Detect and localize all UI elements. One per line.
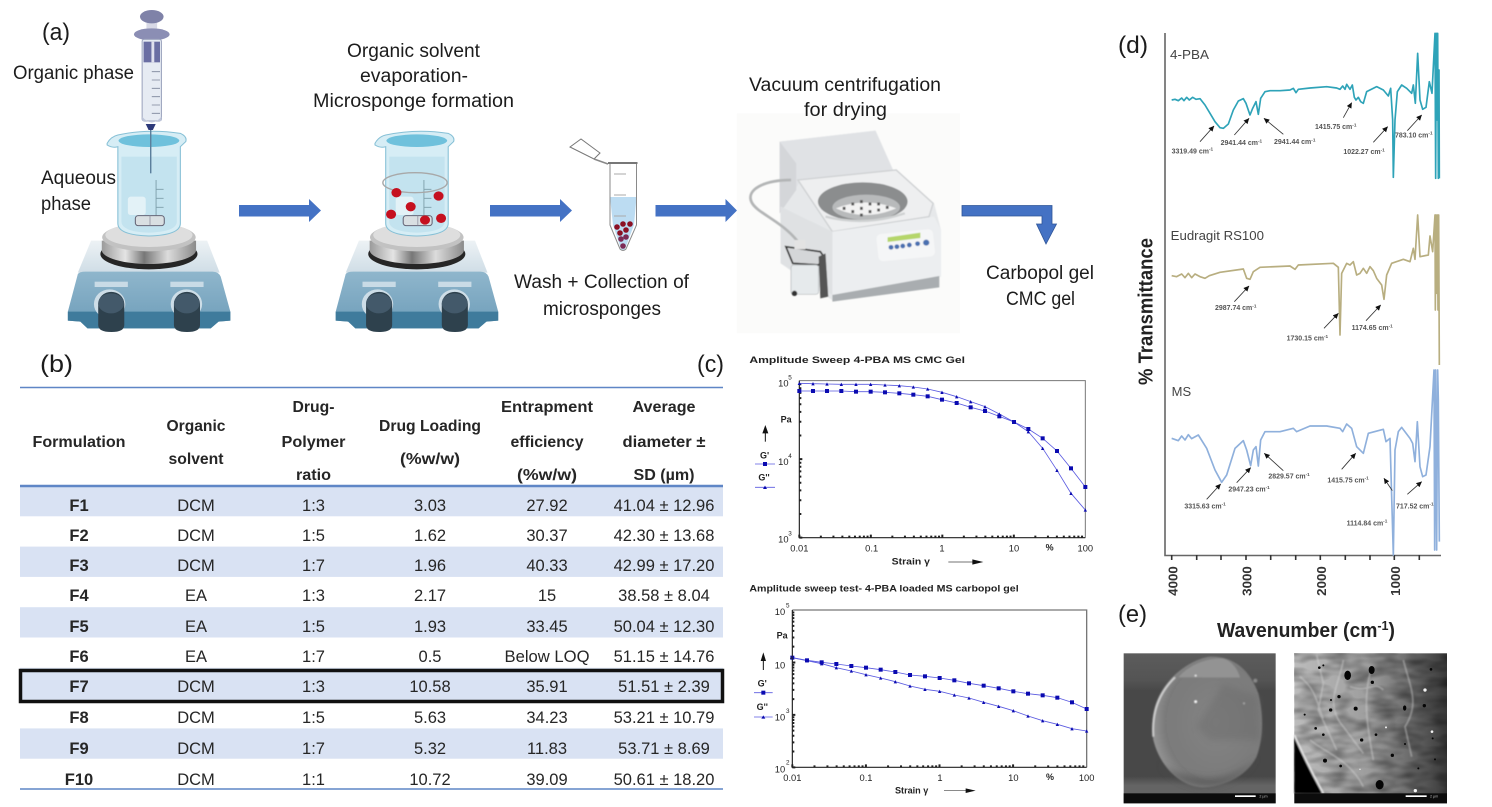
table header: Entrapment — [501, 399, 593, 416]
table row F7 highlighted: 1:3 — [302, 678, 325, 696]
panel label (d): (d) — [1118, 32, 1148, 59]
x axis labels: 0.1 — [860, 773, 872, 783]
table row F9: 53.71 ± 8.69 — [618, 740, 710, 758]
panel: (a) microsponge preparation workflow — [13, 10, 1094, 333]
table row F9 — [69, 740, 710, 758]
table row F3: 40.33 — [526, 557, 568, 575]
table row F7 highlighted: 35.91 — [526, 678, 568, 696]
spectrum: 4-PBA: -1 — [1428, 131, 1433, 136]
image: SEM porous surface: 2 µm — [1430, 794, 1438, 798]
spectrum: MS: -1 — [1383, 519, 1388, 524]
y axis labels: 4 — [788, 453, 792, 460]
chart: amplitude sweep CMC gel — [749, 355, 1093, 566]
panel: (c) amplitude sweep charts — [697, 351, 1094, 795]
table row F6: Below LOQ — [504, 648, 590, 666]
label: microsponges: microsponges — [543, 299, 661, 320]
table row F5: F5 — [69, 618, 89, 636]
spectrum: 4-PBA — [1170, 33, 1439, 178]
table row F8: F8 — [69, 709, 89, 727]
y axis labels: 10 — [775, 712, 785, 722]
table row F9: 5.32 — [414, 740, 446, 758]
table row F1: 27.92 — [526, 497, 568, 515]
x axis tick labels — [1165, 566, 1403, 596]
spectrum: Eudragit RS100: MS — [1172, 384, 1191, 399]
table row F3: 1:7 — [302, 557, 325, 575]
spectrum: Eudragit RS100: 1174.65 cm — [1352, 325, 1389, 332]
spectrum: MS: -1 — [1365, 476, 1369, 481]
panel label (b): (b) — [40, 351, 73, 378]
arrow: step 2 — [490, 199, 572, 222]
table row F3: F3 — [69, 557, 89, 575]
table row bands — [20, 486, 723, 759]
legend: G' — [758, 679, 767, 689]
spectrum: MS: 3315.63 cm — [1184, 503, 1222, 510]
x axis labels: 10 — [1009, 544, 1019, 554]
table header: efficiency — [510, 434, 584, 451]
spectrum: MS: -1 — [1222, 502, 1226, 507]
table row F3 — [69, 557, 714, 575]
table header: Average — [632, 399, 696, 416]
spectrum: 4-PBA: -1 — [1381, 147, 1385, 152]
y axis labels: 10 — [775, 607, 785, 617]
table row F8: 53.21 ± 10.79 — [614, 709, 714, 727]
label: carbopol gel: Carbopol gel — [986, 263, 1094, 284]
legend: G'' — [758, 472, 770, 482]
series G'' — [792, 658, 1087, 731]
table row F2: 30.37 — [526, 527, 568, 545]
arrow: step 1 — [239, 199, 321, 222]
legend — [754, 679, 773, 719]
axis title Pa — [762, 415, 793, 442]
y axis labels — [778, 375, 792, 545]
chart title: Amplitude Sweep 4-PBA MS CMC Gel — [749, 355, 965, 365]
x axis labels: 0.01 — [783, 773, 801, 783]
y axis labels: 5 — [786, 602, 790, 609]
table row F8: DCM — [177, 709, 215, 727]
x axis labels: 100 — [1079, 773, 1094, 783]
table row F5: 1.93 — [414, 618, 446, 636]
spectrum: MS: 1114.84 cm — [1347, 520, 1383, 527]
table row F5: 50.04 ± 12.30 — [614, 618, 714, 636]
series G'' — [799, 383, 1085, 510]
panel: (d) FTIR spectra — [1118, 32, 1441, 642]
panel: (b) formulation table — [20, 351, 723, 789]
spectrum: Eudragit RS100: Eudragit RS100 — [1171, 228, 1264, 243]
table row F9: F9 — [69, 740, 89, 758]
arrow: step 3 — [656, 199, 737, 222]
x axis labels: 0.1 — [865, 544, 878, 554]
table row F9: 1:7 — [302, 740, 325, 758]
x axis labels: % — [1046, 772, 1054, 782]
spectrum: Eudragit RS100: -1 — [1252, 303, 1257, 308]
panel: (e) SEM micrographs — [1118, 601, 1447, 803]
table row F10: 1:1 — [302, 771, 325, 789]
table row F8 — [69, 709, 714, 727]
icon: hot plate with microsponges forming — [336, 131, 498, 332]
table row F7 highlighted: DCM — [177, 678, 215, 696]
table row F4: 15 — [538, 587, 556, 605]
label: phase: phase — [41, 194, 91, 215]
panel label (a): (a) — [42, 19, 70, 46]
table row F10: 39.09 — [526, 771, 568, 789]
table row F8: 5.63 — [414, 709, 446, 727]
image: SEM whole microsponge — [1124, 653, 1276, 803]
spectrum: 4-PBA: -1 — [1209, 147, 1214, 152]
table header: Organic — [166, 418, 226, 435]
table row F10: DCM — [177, 771, 215, 789]
table row F5 — [69, 618, 714, 636]
spectrum: 4-PBA: 783.10 cm — [1395, 132, 1428, 139]
table header: solvent — [168, 451, 224, 468]
x axis tick labels: 3000 — [1240, 566, 1255, 596]
series G' — [799, 391, 1085, 487]
table rules — [20, 388, 723, 789]
table row F4: 38.58 ± 8.04 — [618, 587, 710, 605]
table row F8: 1:5 — [302, 709, 325, 727]
spectrum: MS: 2947.23 cm — [1228, 487, 1266, 494]
x axis labels: 1 — [939, 544, 945, 554]
table header: Polymer — [282, 434, 346, 451]
spectrum: MS: 2829.57 cm — [1268, 474, 1306, 481]
table row F6 — [69, 648, 714, 666]
panel label (e): (e) — [1118, 601, 1147, 628]
table row F3: 1.96 — [414, 557, 446, 575]
table row F10: 50.61 ± 18.20 — [614, 771, 714, 789]
icon: syringe with organic phase — [134, 10, 170, 173]
spectrum: 4-PBA: -1 — [1258, 138, 1263, 143]
y axis labels: 10 — [775, 660, 785, 670]
y axis labels: 10 — [778, 379, 789, 389]
table row F2: 1.62 — [414, 527, 446, 545]
table row F10: F10 — [65, 771, 93, 789]
table row F8: 34.23 — [526, 709, 568, 727]
table row F1: F1 — [69, 497, 89, 515]
y axis labels: 10 — [778, 457, 789, 467]
legend — [755, 450, 775, 489]
chart: amplitude sweep carbopol gel — [749, 584, 1094, 795]
y axis labels: 10 — [775, 764, 785, 774]
axis title strain — [892, 556, 983, 566]
table row F1: 1:3 — [302, 497, 325, 515]
axis title Pa: Pa — [777, 630, 789, 640]
table header — [32, 399, 706, 484]
spectrum: 4-PBA: 2941.44 cm — [1274, 139, 1311, 146]
table row F2: F2 — [69, 527, 89, 545]
label: vacuum centrifugation: Vacuum centrifugation — [749, 75, 941, 96]
spectrum: MS: 1415.75 cm — [1327, 477, 1365, 484]
table header: SD (µm) — [634, 467, 694, 484]
table row F5: 33.45 — [526, 618, 568, 636]
table row F4: 1:3 — [302, 587, 325, 605]
table row F7 highlighted: 51.51 ± 2.39 — [618, 678, 710, 696]
table row F7 highlighted — [20, 670, 722, 702]
table row F2 — [69, 527, 714, 545]
table row F2: 1:5 — [302, 527, 325, 545]
y axis labels: 10 — [778, 535, 789, 545]
table row F6: EA — [185, 648, 207, 666]
table header: ratio — [296, 467, 331, 484]
table header: (%w/w) — [517, 467, 577, 484]
legend: G' — [760, 450, 769, 460]
table row F9: DCM — [177, 740, 215, 758]
spectrum: MS: 717.52 cm — [1396, 503, 1429, 510]
spectrum: MS: -1 — [1266, 485, 1270, 490]
table header: Drug Loading — [379, 418, 481, 435]
label: CMC gel: CMC gel — [1006, 289, 1075, 310]
x axis labels — [790, 543, 1093, 554]
label: aqueous: Aqueous — [41, 168, 116, 189]
table row F1 — [69, 497, 714, 515]
axis title Pa: Pa — [781, 415, 793, 425]
label: for drying: for drying — [804, 100, 887, 121]
table row F4: F4 — [69, 587, 89, 605]
axes — [1165, 33, 1441, 560]
x axis labels: 0.01 — [790, 544, 808, 554]
y axis labels: 5 — [788, 375, 792, 382]
table row F4 — [69, 587, 710, 605]
table header: diameter ± — [622, 434, 706, 451]
y axis labels: 4 — [790, 655, 794, 662]
table header: (%w/w) — [400, 451, 460, 468]
x axis title: -1 — [1377, 618, 1389, 633]
spectrum: 4-PBA: 2941.44 cm — [1221, 140, 1258, 147]
table row F10: 10.72 — [409, 771, 451, 789]
x axis tick labels: 4000 — [1165, 566, 1180, 596]
panel label (c): (c) — [697, 351, 724, 378]
series G' — [792, 658, 1087, 709]
table row F1: DCM — [177, 497, 215, 515]
x axis tick labels: 2000 — [1314, 566, 1329, 596]
spectrum: MS — [1172, 370, 1439, 555]
chart title: Amplitude sweep test- 4-PBA loaded MS carbopol gel — [749, 584, 1019, 594]
table row F6: 51.15 ± 14.76 — [614, 648, 714, 666]
table row F1: 41.04 ± 12.96 — [614, 497, 714, 515]
spectrum: 4-PBA: 1415.75 cm — [1315, 124, 1352, 131]
x axis labels: 10 — [1008, 773, 1019, 783]
table row F5: EA — [185, 618, 207, 636]
x axis labels: 100 — [1078, 544, 1093, 554]
image: SEM porous surface — [1294, 653, 1447, 803]
table header: Formulation — [32, 434, 126, 451]
table row F6: 0.5 — [419, 648, 441, 666]
y axis labels: 3 — [788, 531, 792, 538]
table row F2: DCM — [177, 527, 215, 545]
spectrum: Eudragit RS100: -1 — [1389, 323, 1393, 328]
legend: G'' — [757, 702, 768, 712]
icon: hot plate with aqueous phase beaker — [68, 131, 230, 332]
spectrum: 4-PBA: -1 — [1311, 137, 1316, 142]
arrow: bent arrow to gels — [962, 206, 1056, 244]
table row F7 highlighted: 10.58 — [409, 678, 451, 696]
spectrum: 4-PBA: -1 — [1352, 122, 1357, 127]
icon: microcentrifuge tube — [570, 139, 638, 250]
image: SEM whole microsponge: 2 µm — [1259, 794, 1268, 798]
table row F9: 11.83 — [527, 740, 567, 758]
table header: Drug- — [292, 399, 334, 416]
axis title Pa — [761, 630, 789, 670]
label: solvent evaporation: Organic solvent — [347, 41, 481, 62]
label: evaporation: evaporation- — [360, 66, 468, 87]
x axis title: Wavenumber (cm — [1217, 620, 1383, 642]
table row F4: 2.17 — [414, 587, 446, 605]
table row F6: 1:7 — [302, 648, 325, 666]
table row F3: 42.99 ± 17.20 — [614, 557, 714, 575]
axis title strain — [895, 785, 976, 795]
table row F1: 3.03 — [414, 497, 446, 515]
x axis labels: 1 — [937, 773, 943, 783]
table row F4: EA — [185, 587, 207, 605]
y axis labels — [775, 602, 794, 774]
spectrum: MS: -1 — [1429, 502, 1434, 507]
table row F10 — [65, 771, 714, 789]
x axis title: ) — [1389, 620, 1395, 642]
label: wash and collection: Wash + Collection of — [514, 272, 690, 293]
table row F6: F6 — [69, 648, 89, 666]
label: microsponge formation: Microsponge formation — [313, 91, 514, 112]
spectrum: 4-PBA: 1022.27 cm — [1343, 149, 1381, 156]
x axis labels: % — [1046, 543, 1054, 553]
axis title strain: Strain γ — [892, 556, 930, 566]
table row F2: 42.30 ± 13.68 — [614, 527, 714, 545]
axis title strain: Strain γ — [895, 785, 928, 795]
table row F7 highlighted: F7 — [69, 678, 89, 696]
spectrum: Eudragit RS100: 1730.15 cm — [1287, 336, 1324, 343]
spectrum: Eudragit RS100: 2987.74 cm — [1215, 305, 1252, 312]
spectrum: Eudragit RS100 — [1171, 215, 1439, 399]
spectrum: 4-PBA: 4-PBA — [1170, 47, 1209, 62]
y axis labels: 2 — [786, 759, 790, 766]
spectrum: 4-PBA: 3319.49 cm — [1172, 148, 1209, 155]
y axis title: % Transmittance — [1136, 238, 1158, 385]
spectrum: Eudragit RS100: -1 — [1324, 334, 1329, 339]
x axis labels — [783, 772, 1094, 783]
spectrum: MS: -1 — [1306, 472, 1310, 477]
y axis labels: 3 — [786, 708, 790, 715]
table row F3: DCM — [177, 557, 215, 575]
image: vacuum centrifuge — [737, 113, 960, 333]
table row F5: 1:5 — [302, 618, 325, 636]
x axis tick labels: 1000 — [1388, 566, 1403, 596]
label: organic phase: Organic phase — [13, 63, 134, 84]
